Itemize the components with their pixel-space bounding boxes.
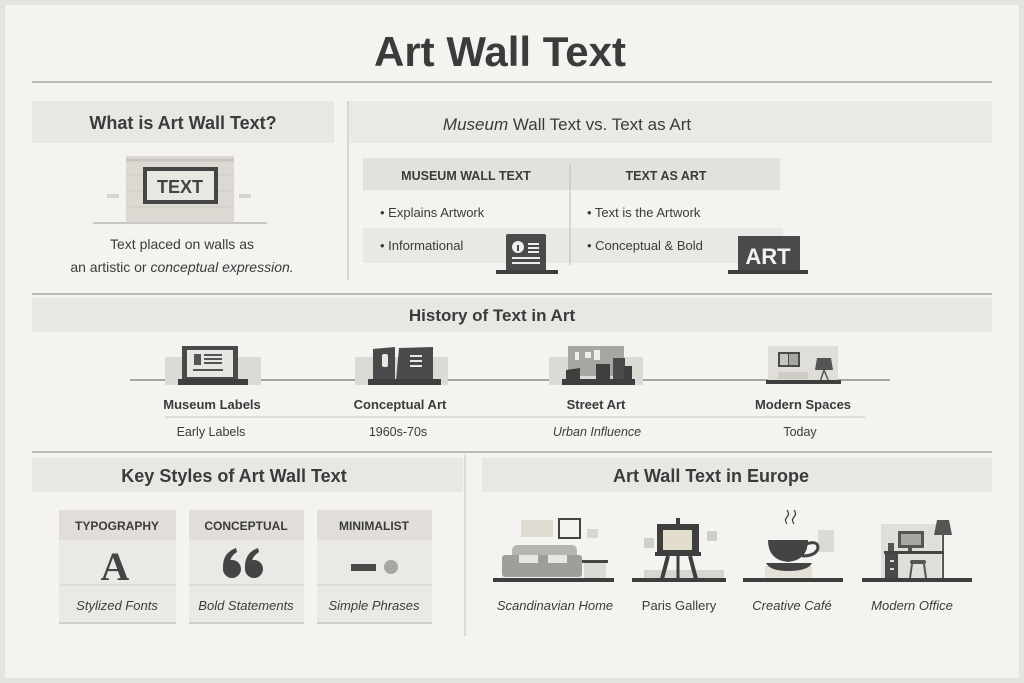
icon: creative cafe: [743, 510, 843, 582]
title: Art Wall Text: [374, 28, 626, 75]
heading: history: [32, 298, 992, 332]
card: typography: [59, 510, 176, 623]
timeline labels: [163, 397, 865, 439]
icon: paris gallery: [632, 518, 726, 582]
timeline labels: Early Labels: [177, 425, 245, 439]
europe labels: Scandinavian Home: [497, 598, 613, 613]
timeline labels: Modern Spaces: [755, 397, 851, 412]
heading: comparison: Museum Wall Text vs. Text as Art: [443, 115, 691, 134]
europe labels: Modern Office: [871, 598, 953, 613]
comparison table: • Conceptual & Bold: [587, 238, 703, 253]
heading: europe: [482, 458, 992, 492]
timeline labels: Conceptual Art: [354, 397, 447, 412]
timeline labels: Museum Labels: [163, 397, 261, 412]
card: conceptual: [189, 510, 304, 623]
timeline labels: Today: [783, 425, 817, 439]
heading: key styles: Key Styles of Art Wall Text: [121, 466, 347, 486]
comparison table: • Informational: [380, 238, 463, 253]
icon: ART sign: [728, 236, 808, 274]
panel: history timeline: [32, 298, 992, 439]
card: typography: A: [101, 544, 130, 589]
icon: ART sign: ART: [745, 244, 791, 269]
card: typography: TYPOGRAPHY: [75, 519, 159, 533]
icon: text sign on wall: TEXT: [157, 177, 203, 197]
panel: europe: [482, 458, 992, 613]
icon: street art: [549, 346, 643, 385]
comparison table: • Explains Artwork: [380, 205, 485, 220]
icon: quote mark: [223, 548, 263, 578]
europe labels: Paris Gallery: [642, 598, 717, 613]
card: minimalist: [317, 510, 432, 623]
europe labels: Creative Café: [752, 598, 832, 613]
timeline labels: 1960s-70s: [369, 425, 427, 439]
comparison table: MUSEUM WALL TEXT: [401, 169, 531, 183]
card: conceptual: Bold Statements: [198, 598, 294, 613]
panel: key styles: [32, 458, 463, 623]
panel: museum vs text as art: [349, 101, 992, 274]
heading: what is: What is Art Wall Text?: [89, 113, 277, 133]
comparison table: • Text is the Artwork: [587, 205, 701, 220]
heading: key styles: [32, 458, 463, 492]
icon: scandinavian home: [493, 519, 614, 582]
comparison table: [363, 158, 783, 265]
icon: text sign on wall: [93, 156, 267, 223]
icon: info sign: [496, 234, 558, 274]
card: minimalist: MINIMALIST: [339, 519, 410, 533]
icon: conceptual art: [355, 347, 448, 385]
heading: comparison: [349, 101, 992, 143]
comparison table: TEXT AS ART: [625, 169, 707, 183]
panel: what is art wall text: [32, 101, 334, 275]
card: conceptual: CONCEPTUAL: [204, 519, 288, 533]
description: Text placed on walls as: [110, 236, 254, 252]
description: [70, 236, 294, 275]
description: an artistic or conceptual expression.: [70, 259, 294, 275]
europe labels: [497, 598, 953, 613]
heading: history: History of Text in Art: [409, 306, 575, 325]
card: minimalist: Simple Phrases: [328, 598, 420, 613]
heading: europe: Art Wall Text in Europe: [613, 466, 809, 486]
icon: modern office: [862, 520, 972, 582]
timeline labels: Urban Influence: [553, 425, 641, 439]
timeline labels: Street Art: [567, 397, 626, 412]
icon: museum labels: [165, 346, 261, 385]
card: typography: Stylized Fonts: [76, 598, 158, 613]
heading: what is: [32, 101, 334, 143]
icon: modern spaces: [766, 346, 841, 384]
